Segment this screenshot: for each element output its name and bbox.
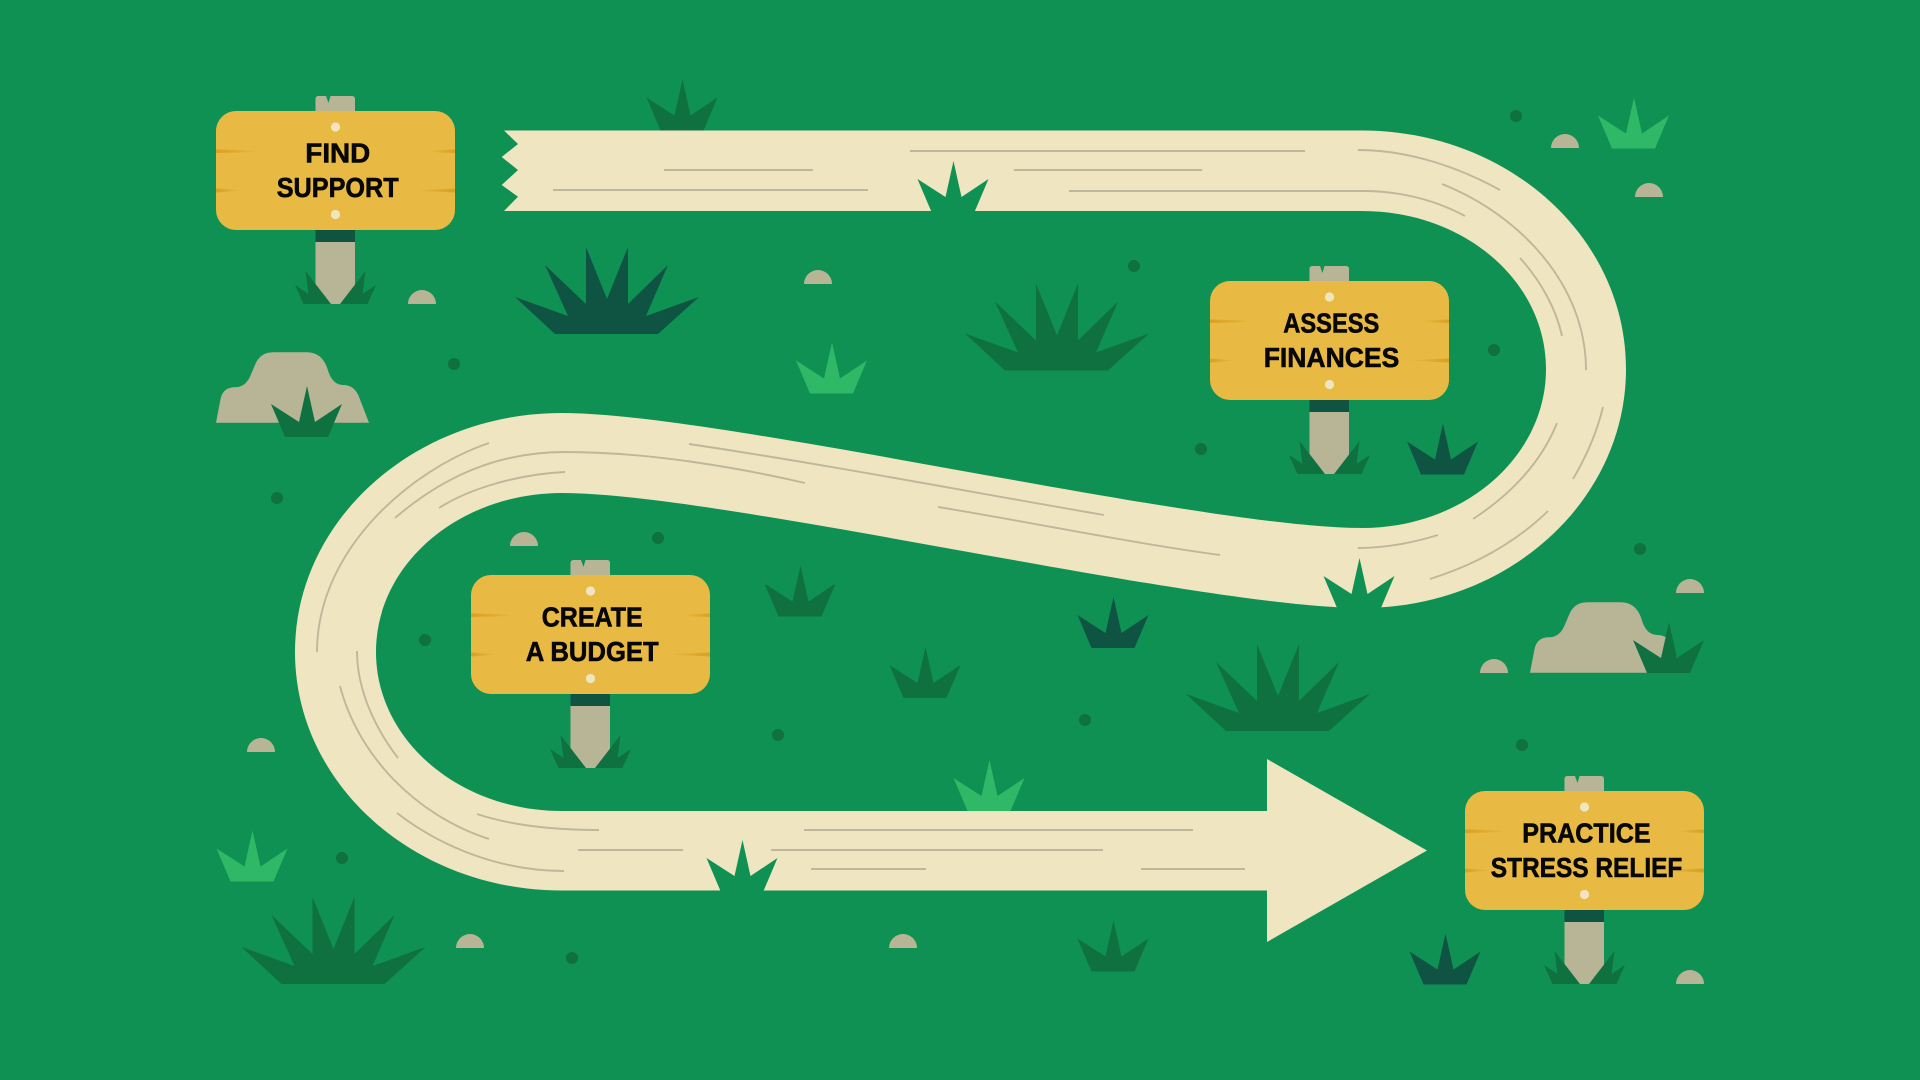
small dark grass tufts (646, 80, 1480, 984)
wood grain lines on path (317, 150, 1603, 871)
sign: find support (216, 96, 455, 304)
sign: find support: FIND (305, 138, 370, 169)
large grass clumps (242, 247, 1370, 984)
sign: practice stress relief (1465, 776, 1704, 984)
sign: practice stress relief: STRESS RELIEF (1491, 852, 1682, 883)
ground dots (271, 110, 1646, 964)
rock with grass: right (1530, 602, 1704, 673)
sign: create a budget: CREATE (542, 602, 643, 632)
sign: assess finances: FINANCES (1264, 342, 1399, 373)
sign: create a budget (471, 560, 710, 768)
sign: create a budget: A BUDGET (526, 636, 659, 667)
sign: practice stress relief: PRACTICE (1522, 818, 1651, 848)
sign: find support: SUPPORT (277, 172, 399, 203)
sign: assess finances: ASSESS (1283, 308, 1379, 338)
sign: assess finances (1210, 266, 1449, 474)
winding wooden arrow path (295, 130, 1626, 942)
small light grass tufts (216, 98, 1669, 882)
grass cutouts over path (706, 161, 1394, 891)
pebbles (247, 134, 1704, 984)
rock with grass: left (216, 352, 369, 437)
